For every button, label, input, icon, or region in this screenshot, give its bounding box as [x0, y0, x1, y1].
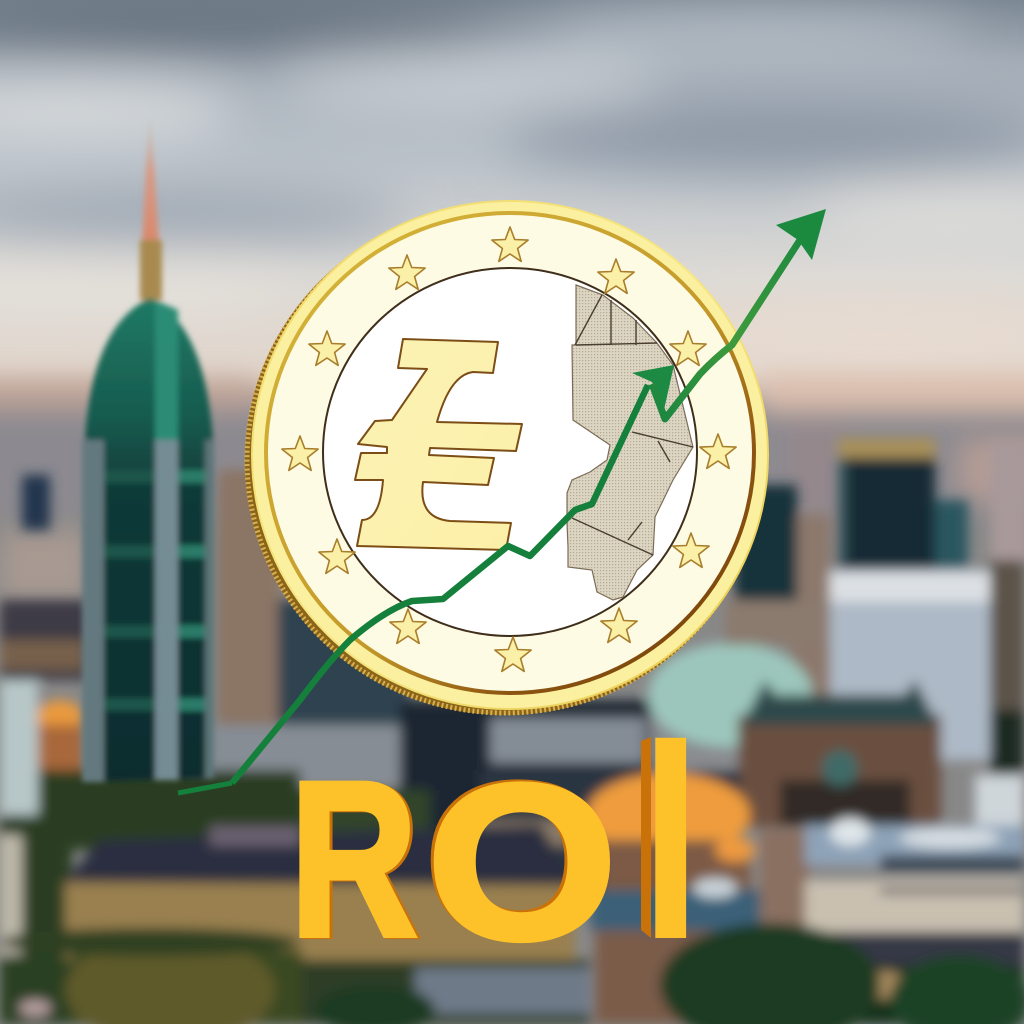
ROI title — [290, 676, 700, 1001]
arrow head — [776, 209, 826, 260]
background: green domed tower — [82, 120, 214, 782]
letter I side face — [641, 737, 651, 938]
coin: gold rim — [252, 201, 768, 709]
letter O: O — [427, 740, 617, 985]
coin: cream band — [266, 213, 754, 693]
coin: outer ring — [266, 213, 754, 693]
background: cloudy sky — [0, 0, 1024, 440]
map — [567, 285, 693, 600]
green growth arrow — [178, 209, 826, 793]
letter R: R — [290, 737, 417, 982]
coin — [245, 201, 768, 715]
coin: inner circle — [323, 268, 697, 636]
background: blurred city skyline — [0, 438, 1024, 1024]
background: blurred horizon — [0, 375, 1024, 600]
stars ring — [282, 227, 736, 671]
icon: currency symbol — [355, 339, 522, 550]
letter I: I — [641, 676, 700, 1001]
coin: reeded edge — [245, 205, 765, 715]
